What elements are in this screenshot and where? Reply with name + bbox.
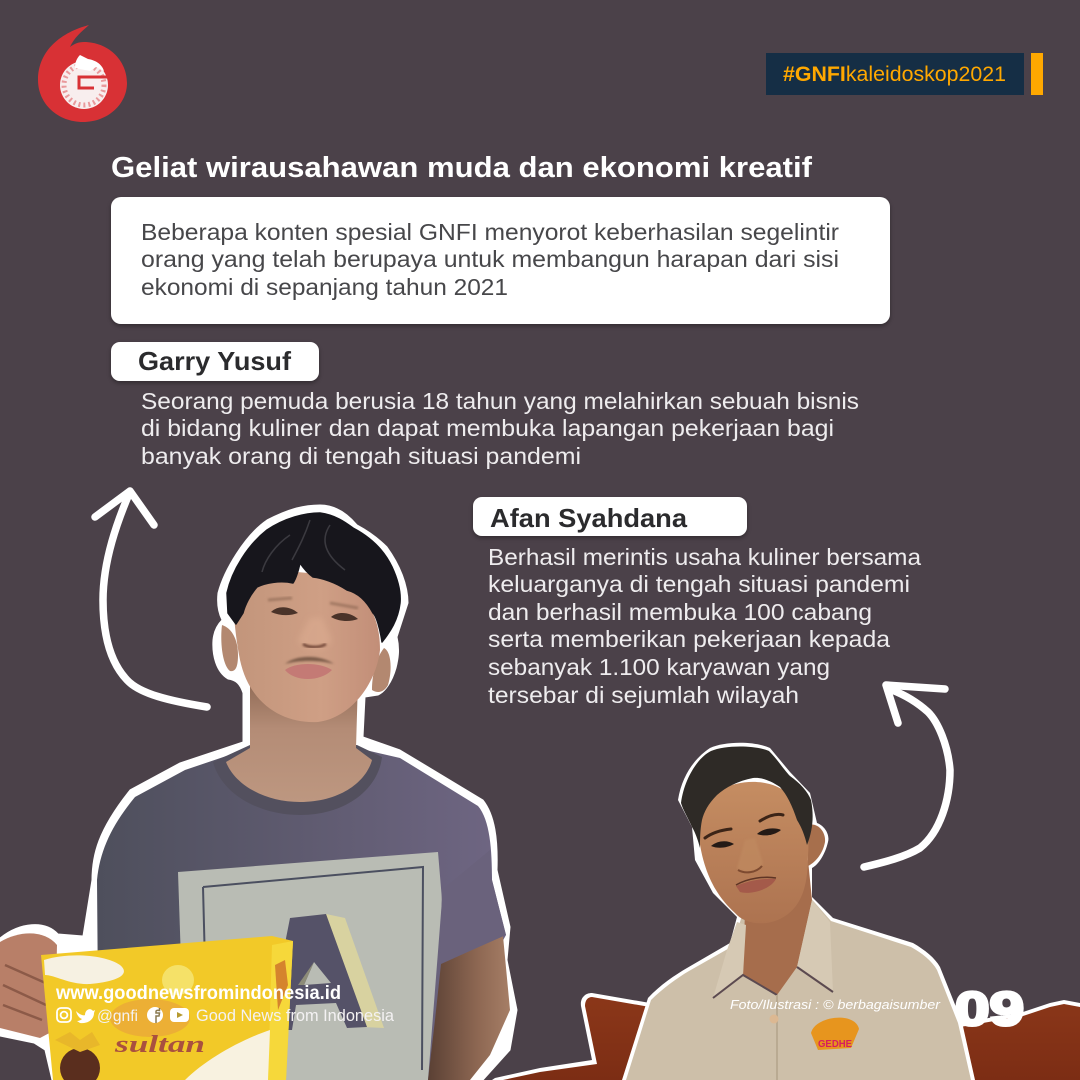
hashtag banner xyxy=(766,53,1043,95)
text: Afan description xyxy=(488,544,921,708)
right arm xyxy=(428,936,510,1080)
text: Afan description: sebanyak 1.100 karyawan yang xyxy=(488,654,830,680)
name label: Afan Syahdana xyxy=(473,497,747,536)
icon: instagram xyxy=(57,1008,71,1022)
arrow: to Garry text xyxy=(95,491,207,707)
panel: intro card xyxy=(111,197,890,324)
text: Afan description: serta memberikan pekerjaan kepada xyxy=(488,626,890,652)
footer: website: www.goodnewsfromindonesia.id xyxy=(55,983,341,1004)
nose xyxy=(298,618,332,649)
face xyxy=(698,782,808,923)
page name: Good News from Indonesia xyxy=(196,1006,395,1025)
text: Afan description: Berhasil merintis usaha kuliner bersama xyxy=(488,544,921,570)
shirt badge: GEDHE xyxy=(818,1039,852,1050)
name label: Garry Yusuf xyxy=(111,342,319,381)
hair xyxy=(681,746,813,848)
neck and face xyxy=(213,513,400,815)
name label: Garry Yusuf: Garry Yusuf xyxy=(138,346,291,376)
text: Afan description: tersebar di sejumlah wilayah xyxy=(488,682,799,708)
yellow box: sultan xyxy=(114,1032,205,1058)
icon: twitter xyxy=(76,1009,95,1023)
icon: youtube xyxy=(170,1008,189,1022)
mouth xyxy=(285,664,332,679)
sofa xyxy=(492,993,1080,1080)
panel: intro card: orang yang telah berupaya untuk membangun harapan dari sisi xyxy=(141,246,839,272)
hashtag banner: #GNFIkaleidoskop2021 xyxy=(783,63,1006,86)
page number: 09 xyxy=(955,982,1024,1035)
icon: facebook xyxy=(147,1007,163,1023)
footer: social line xyxy=(57,1006,395,1025)
panel: intro card: Beberapa konten spesial GNFI menyorot keberhasilan segelintir xyxy=(141,219,839,245)
shirt badge xyxy=(811,1018,859,1050)
text: Garry description: Seorang pemuda berusia 18 tahun yang melahirkan sebuah bisnis xyxy=(141,388,859,414)
grey t-shirt xyxy=(97,748,506,1080)
white sticker outline xyxy=(622,743,975,1080)
eyes and brows xyxy=(711,841,734,848)
collar flaps xyxy=(713,900,833,998)
white sticker outline xyxy=(0,505,517,1080)
title: Geliat wirausahawan muda dan ekonomi kreatif xyxy=(111,152,812,184)
shirt xyxy=(626,895,971,1080)
text: Garry description: di bidang kuliner dan dapat membuka lapangan pekerjaan bagi xyxy=(141,415,834,441)
neck xyxy=(743,860,812,995)
eyes xyxy=(271,607,298,615)
logo: GNFI red six with garuda xyxy=(38,25,127,122)
text: Garry description xyxy=(141,388,859,469)
text: Afan description: keluarganya di tengah situasi pandemi xyxy=(488,571,910,597)
photo: Afan Syahdana on a sofa xyxy=(492,743,1080,1080)
ear xyxy=(808,824,825,866)
shirt print xyxy=(178,852,442,1080)
handle: @gnfi xyxy=(97,1008,138,1025)
photo: Garry Yusuf holding a box xyxy=(0,505,517,1080)
mouth xyxy=(736,879,776,893)
nose xyxy=(737,838,763,872)
text: Garry description: banyak orang di tengah situasi pandemi xyxy=(141,443,581,469)
left hand xyxy=(0,933,57,1038)
name label: Afan Syahdana: Afan Syahdana xyxy=(490,503,688,533)
placket and buttons xyxy=(776,995,778,1080)
arrow: to Afan text xyxy=(864,685,950,867)
hair xyxy=(227,513,400,642)
panel: intro card: ekonomi di sepanjang tahun 2021 xyxy=(141,274,508,300)
moustache xyxy=(285,657,334,664)
text: Afan description: dan berhasil membuka 100 cabang xyxy=(488,599,872,625)
yellow box xyxy=(41,936,293,1080)
right sleeve xyxy=(440,850,506,964)
photo credit: Foto/Ilustrasi : © berbagaisumber xyxy=(730,997,941,1012)
